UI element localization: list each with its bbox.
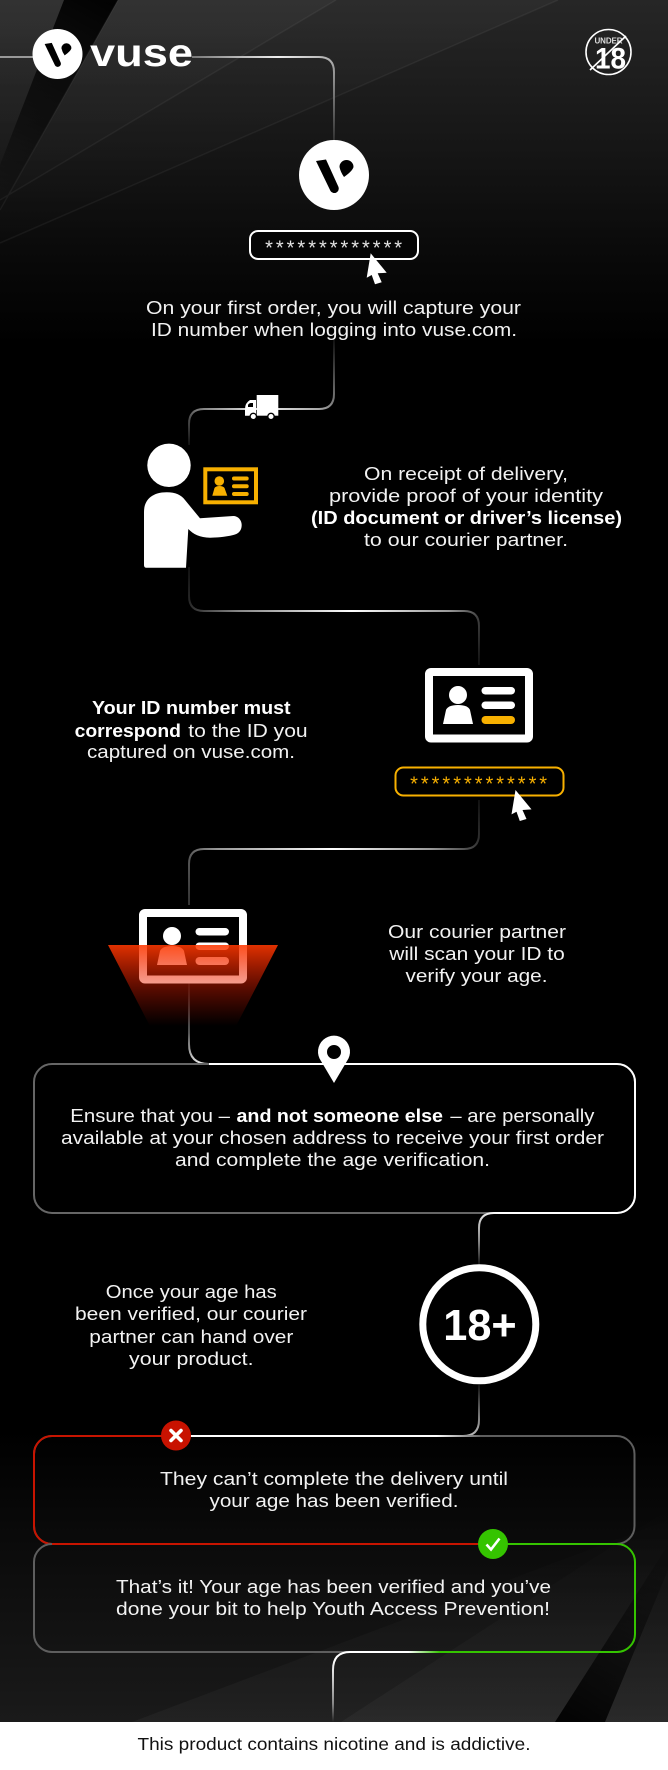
panel: be available at address	[34, 1036, 635, 1213]
text: courier scan	[388, 922, 566, 986]
yellow id input field: *************	[410, 774, 547, 796]
text: hand over product: Once your age has	[106, 1282, 277, 1302]
text: id must correspond: Your ID number must	[92, 698, 291, 718]
step 1: vuse login	[146, 140, 521, 340]
logo: vuse: vuse	[90, 32, 193, 75]
text: courier scan: Our courier partner	[388, 922, 566, 942]
text: be available: and not someone else	[236, 1106, 443, 1126]
icon: yellow id card	[205, 469, 256, 502]
icon: cursor	[512, 790, 532, 821]
connector: 18+ to boxes	[463, 1385, 479, 1436]
icon: green check	[478, 1529, 508, 1559]
text: courier scan: will scan your ID to	[388, 944, 565, 964]
text: proof of identity: provide proof of your identity	[329, 486, 603, 506]
text: be available: and complete the age verification.	[175, 1150, 490, 1170]
step 3: id match	[75, 672, 563, 821]
text: age verified: That’s it! Your age has been verified and you’ve	[116, 1577, 551, 1597]
panel: delivery cannot complete	[34, 1420, 634, 1544]
text: age verified: done your bit to help Youth Access Prevention!	[116, 1599, 550, 1619]
icon: delivery truck	[245, 395, 278, 420]
text: id must correspond: correspond	[75, 721, 181, 741]
icon: red cross	[161, 1420, 191, 1450]
text: be available: Ensure that you –	[70, 1106, 230, 1126]
icon: 18+ circle: 18+	[443, 1301, 517, 1350]
text: courier scan: verify your age.	[406, 966, 548, 986]
logo: vuse	[32, 29, 193, 79]
text: hand over product	[75, 1282, 307, 1369]
icon: location pin	[318, 1036, 350, 1083]
text: hand over product: your product.	[129, 1349, 254, 1369]
text: proof of identity: to our courier partner.	[364, 530, 568, 550]
text: hand over product: partner can hand over	[89, 1327, 293, 1347]
step 5: age verified	[75, 1268, 536, 1381]
id input field	[250, 231, 418, 260]
text: proof of identity	[311, 464, 622, 550]
icon: under 18 badge	[586, 30, 631, 76]
icon: vuse circle	[299, 140, 369, 210]
scanner beam	[108, 945, 278, 1030]
text: cannot complete	[160, 1469, 508, 1511]
text: first order: ID number when logging into vuse.com.	[151, 320, 517, 340]
id input field: *************	[265, 238, 402, 260]
text: proof of identity: On receipt of delivery,	[364, 464, 568, 484]
step 2: proof of identity	[144, 444, 622, 568]
text: id must correspond: to the ID you	[188, 721, 308, 741]
step 4: courier scan	[108, 913, 566, 1030]
text: be available: available at your chosen address to receive your first order	[61, 1128, 604, 1148]
text: cannot complete: They can’t complete the delivery until	[160, 1469, 508, 1489]
text: cannot complete: your age has been verified.	[210, 1491, 458, 1511]
text: be available	[61, 1106, 604, 1170]
text: age verified	[116, 1577, 551, 1619]
text: proof of identity: (ID document or driver’s license)	[311, 508, 622, 528]
icon: under 18 badge: 18	[595, 42, 626, 76]
connector: box to 18+	[479, 1213, 500, 1265]
yellow id input field	[396, 768, 564, 796]
icon: white id card	[429, 672, 529, 738]
icon: 18+ circle	[423, 1268, 536, 1381]
icon: id card	[143, 913, 243, 980]
text: first order: On your first order, you will capture your	[146, 298, 521, 318]
text: hand over product: been verified, our courier	[75, 1304, 307, 1324]
text: be available: – are personally	[450, 1106, 594, 1126]
footer: nicotine warning: This product contains nicotine and is addictive.	[138, 1734, 530, 1754]
footer: nicotine warning	[0, 1722, 668, 1770]
panel: age verified	[34, 1529, 635, 1722]
text: first order	[146, 298, 521, 340]
icon: under 18 badge: UNDER	[594, 36, 623, 46]
text: id must correspond	[75, 698, 308, 762]
icon: person	[144, 444, 242, 568]
connector path	[0, 57, 479, 1064]
icon: cursor	[367, 253, 387, 284]
text: id must correspond: captured on vuse.com.	[87, 742, 295, 762]
